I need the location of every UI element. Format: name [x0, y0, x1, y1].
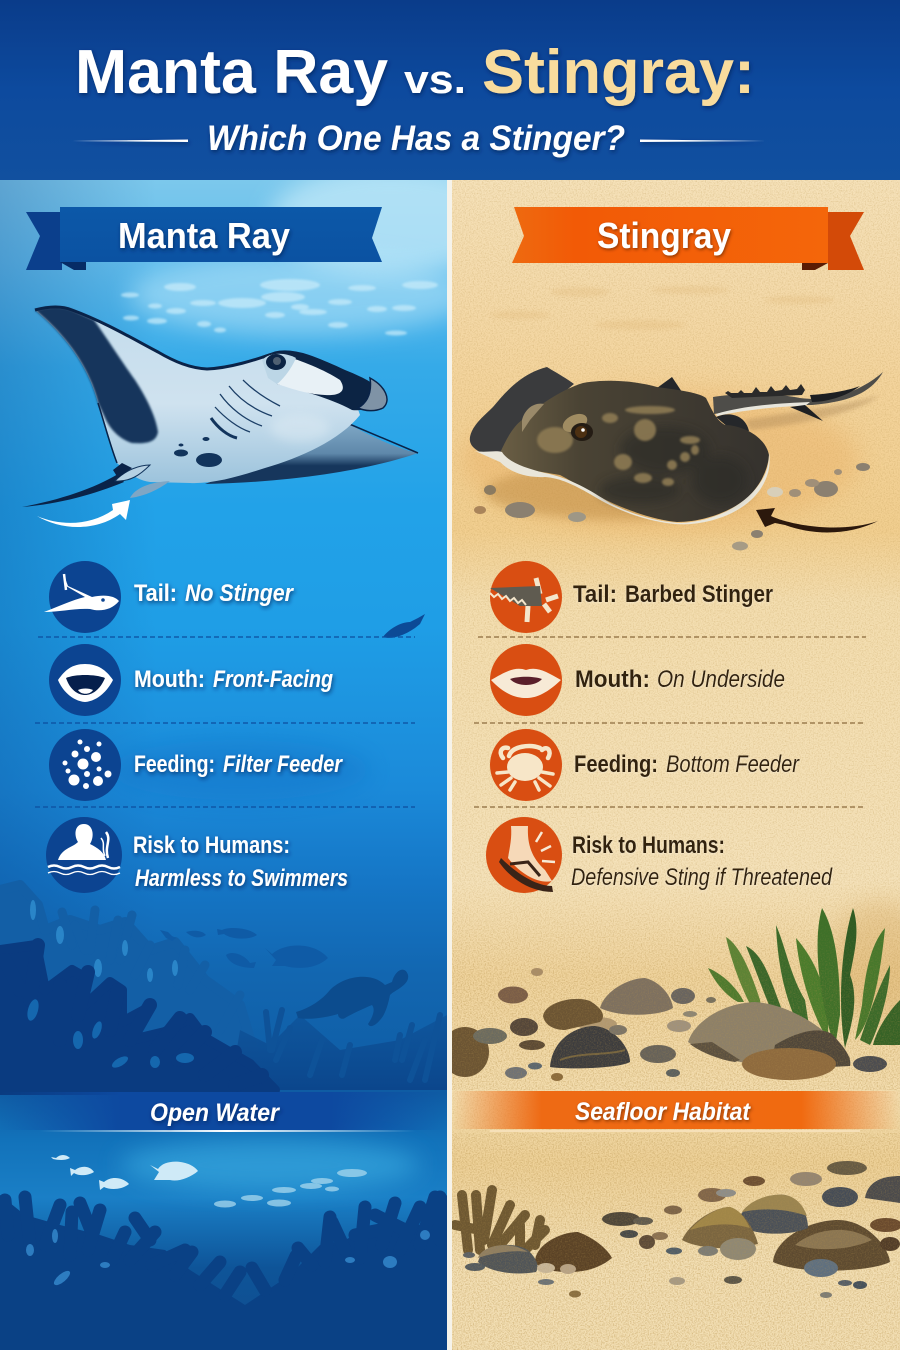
icon: swimmer	[46, 817, 122, 893]
label: Mouth:	[134, 666, 205, 693]
underside rim	[475, 451, 770, 524]
pectoral fins	[115, 465, 150, 481]
center divider	[447, 180, 452, 1350]
rock grain	[452, 926, 900, 1090]
sea turtle silhouette	[296, 970, 408, 1026]
pale fish school in open water	[51, 1155, 198, 1190]
label	[571, 832, 833, 891]
label: Front-Facing	[213, 666, 333, 693]
sand texture	[452, 180, 900, 1350]
small fish silhouette	[383, 614, 425, 638]
seaweed	[708, 908, 900, 1048]
icon: lips	[490, 644, 562, 716]
blotches	[600, 426, 748, 504]
gill slits	[215, 380, 280, 432]
tail shadow	[745, 395, 880, 430]
row separators	[35, 637, 415, 807]
dorsal and pelvic fins	[657, 377, 682, 392]
arrow: stingray tail	[756, 508, 878, 532]
ribbon: Stingray	[512, 207, 864, 270]
tail	[713, 372, 883, 414]
illustration: stingray	[470, 367, 883, 524]
far wing	[205, 423, 418, 484]
row: mouth front-facing	[49, 644, 333, 716]
rocks	[535, 1232, 612, 1272]
dark wing band	[35, 307, 158, 443]
illustration: lower coral reef silhouette	[0, 1195, 447, 1350]
label: Filter Feeder	[223, 751, 343, 778]
label	[134, 751, 343, 778]
tail	[22, 474, 124, 507]
habitat band: Seafloor Habitat	[452, 1091, 900, 1132]
ribbon: Stingray: Stingray	[597, 215, 731, 256]
icon: manta tail	[44, 561, 121, 633]
label: Feeding:	[134, 751, 215, 778]
ribbon: Manta Ray	[26, 207, 382, 270]
water light and shading	[0, 180, 447, 1198]
habitat band: Open Water	[0, 1092, 447, 1132]
arrow: manta tail	[37, 500, 130, 527]
icon: open mouth	[49, 644, 121, 716]
label: Harmless to Swimmers	[135, 865, 348, 892]
panel: left ocean background	[0, 180, 447, 1350]
label	[573, 581, 773, 608]
row: feeding filter feeder	[49, 729, 343, 801]
label: Tail:	[573, 581, 617, 608]
spiracle bump and eye	[522, 404, 544, 432]
row: tail no stinger	[44, 561, 294, 633]
title: Manta Ray	[75, 38, 389, 107]
rocks	[452, 1027, 489, 1077]
row: feeding bottom feeder	[490, 729, 800, 801]
school of fish near the surface	[121, 279, 438, 336]
body	[500, 381, 769, 522]
habitat band: Seafloor Habitat: Seafloor Habitat	[575, 1098, 752, 1126]
label: Risk to Humans:	[133, 832, 290, 859]
illustration: upper coral reef silhouette	[0, 885, 447, 1090]
row: tail barbed stinger	[490, 561, 773, 633]
label	[575, 666, 785, 693]
label: Defensive Sting if Threatened	[571, 864, 833, 891]
label	[134, 580, 294, 607]
back wing	[470, 367, 574, 453]
row: mouth on underside	[490, 644, 785, 716]
pebbles near stingray	[474, 463, 870, 550]
header band	[0, 0, 900, 180]
icon: foot in sandal	[486, 817, 562, 893]
title	[75, 38, 755, 107]
foreground coral	[0, 945, 275, 1090]
brown coral	[455, 1190, 545, 1250]
ribbon: Manta Ray: Manta Ray	[118, 215, 290, 256]
icon: crab	[490, 729, 562, 801]
label	[133, 832, 348, 892]
label: No Stinger	[185, 580, 294, 607]
illustration: lower seafloor rocks and coral	[452, 1133, 900, 1350]
panel: right sand background	[452, 180, 900, 1350]
label	[574, 751, 800, 778]
label	[134, 666, 333, 693]
row: risk to humans harmless	[46, 817, 348, 893]
rock grain	[452, 1133, 900, 1350]
label: On Underside	[657, 666, 785, 693]
fish silhouettes over the reef	[160, 928, 328, 968]
label: Feeding:	[574, 751, 658, 778]
title: vs.	[404, 58, 466, 102]
icon: plankton	[49, 729, 121, 801]
head	[262, 352, 381, 410]
label: Risk to Humans:	[572, 832, 725, 859]
label: Barbed Stinger	[625, 581, 773, 608]
main body	[35, 307, 360, 483]
belly spots	[174, 437, 222, 467]
label: Tail:	[134, 580, 177, 607]
subtitle: Which One Has a Stinger?	[207, 119, 625, 158]
title: Stingray:	[482, 38, 755, 107]
background coral	[0, 885, 447, 1090]
row: risk to humans defensive sting	[486, 817, 833, 893]
habitat band: Open Water: Open Water	[150, 1099, 280, 1127]
icon: barbed tail	[490, 561, 562, 633]
illustration: manta ray	[22, 307, 418, 507]
label: Mouth:	[575, 666, 650, 693]
label: Bottom Feeder	[666, 751, 800, 778]
illustration: upper seafloor rocks and seaweed	[441, 900, 900, 1090]
